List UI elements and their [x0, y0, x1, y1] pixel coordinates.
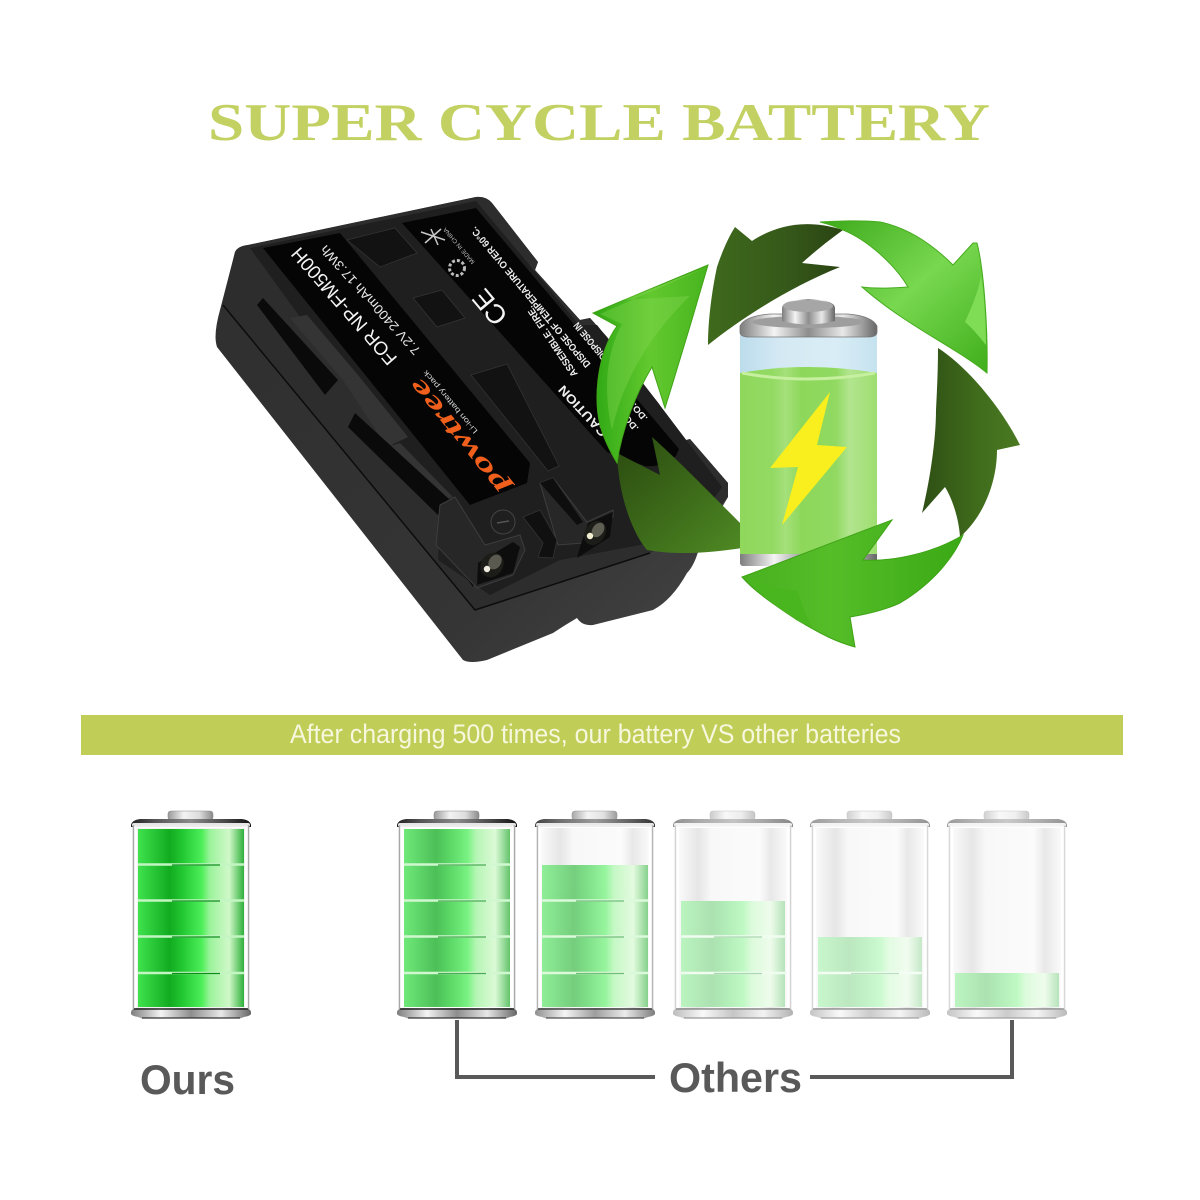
battery body	[216, 197, 728, 662]
central battery icon	[740, 299, 877, 566]
terminal block left	[436, 497, 525, 588]
terminal block right	[540, 478, 613, 545]
product: camera battery	[216, 197, 728, 662]
caution text: .DO.	[620, 411, 641, 433]
caution text: CAUTION	[556, 382, 610, 440]
title: SUPER CYCLE BATTERY	[208, 94, 990, 152]
terminal left	[476, 548, 508, 582]
label: ours: Ours	[140, 1056, 235, 1103]
terminal recess left	[477, 542, 520, 585]
recycle icon	[450, 260, 464, 276]
arrow: top dark	[708, 224, 843, 345]
battery side slots	[257, 298, 475, 587]
caution text	[469, 224, 650, 440]
label: others: Others	[669, 1054, 802, 1101]
terminal slot	[540, 478, 583, 525]
arrow: bottom light green	[742, 520, 963, 647]
brand logo: powtree	[402, 373, 516, 503]
made in china: MADE IN CHINA	[443, 226, 477, 265]
arrow: left light green	[593, 265, 708, 463]
battery: others 4	[810, 811, 930, 1018]
terminal right	[579, 517, 611, 549]
liquid	[740, 367, 877, 560]
arrow: lower-left dark	[617, 437, 742, 553]
bottom metal	[740, 552, 877, 566]
caution text: DISPOSE IN	[572, 320, 609, 361]
icon: lightning bolt	[770, 392, 847, 525]
caution text: ASSEMBLE. FIRE.	[525, 303, 580, 378]
arrow: top right light green	[820, 221, 987, 373]
black caution label	[402, 208, 679, 466]
caution text: .DO.	[629, 401, 650, 423]
polarity mark	[491, 510, 515, 534]
battery: others 5	[947, 811, 1067, 1018]
cap	[782, 299, 835, 324]
comparison banner	[81, 715, 1123, 755]
center notch	[523, 510, 557, 558]
voltage and capacity: 7.2V 2400mAh 17.3Wh	[317, 242, 423, 358]
battery: ours	[131, 811, 251, 1018]
battery top face	[250, 201, 722, 595]
battery: others 3	[673, 811, 793, 1018]
battery: others 1	[397, 811, 517, 1018]
black label strip	[263, 233, 530, 505]
liquid surface	[742, 373, 875, 379]
glass upper	[740, 335, 877, 375]
CE mark: CE	[466, 283, 514, 331]
battery type: Li-ion battery pack	[421, 368, 480, 435]
recesses	[347, 228, 559, 471]
product name: FOR NP-FM500H	[288, 243, 402, 369]
banner text: After charging 500 times, our battery VS other batteries	[290, 719, 901, 749]
rim	[740, 314, 877, 337]
rim inner	[752, 316, 864, 328]
battery: others 2	[535, 811, 655, 1018]
bracket: others	[457, 1020, 1012, 1077]
arrow: right dark	[922, 348, 1020, 537]
side rails	[290, 315, 453, 502]
terminal recess right	[577, 512, 613, 558]
caution text: DISPOSE OF TEMPERATURE OVER 60°C.	[469, 224, 593, 369]
bin icon	[421, 229, 445, 245]
battery seam	[223, 305, 650, 610]
battery mid layer	[223, 197, 728, 610]
